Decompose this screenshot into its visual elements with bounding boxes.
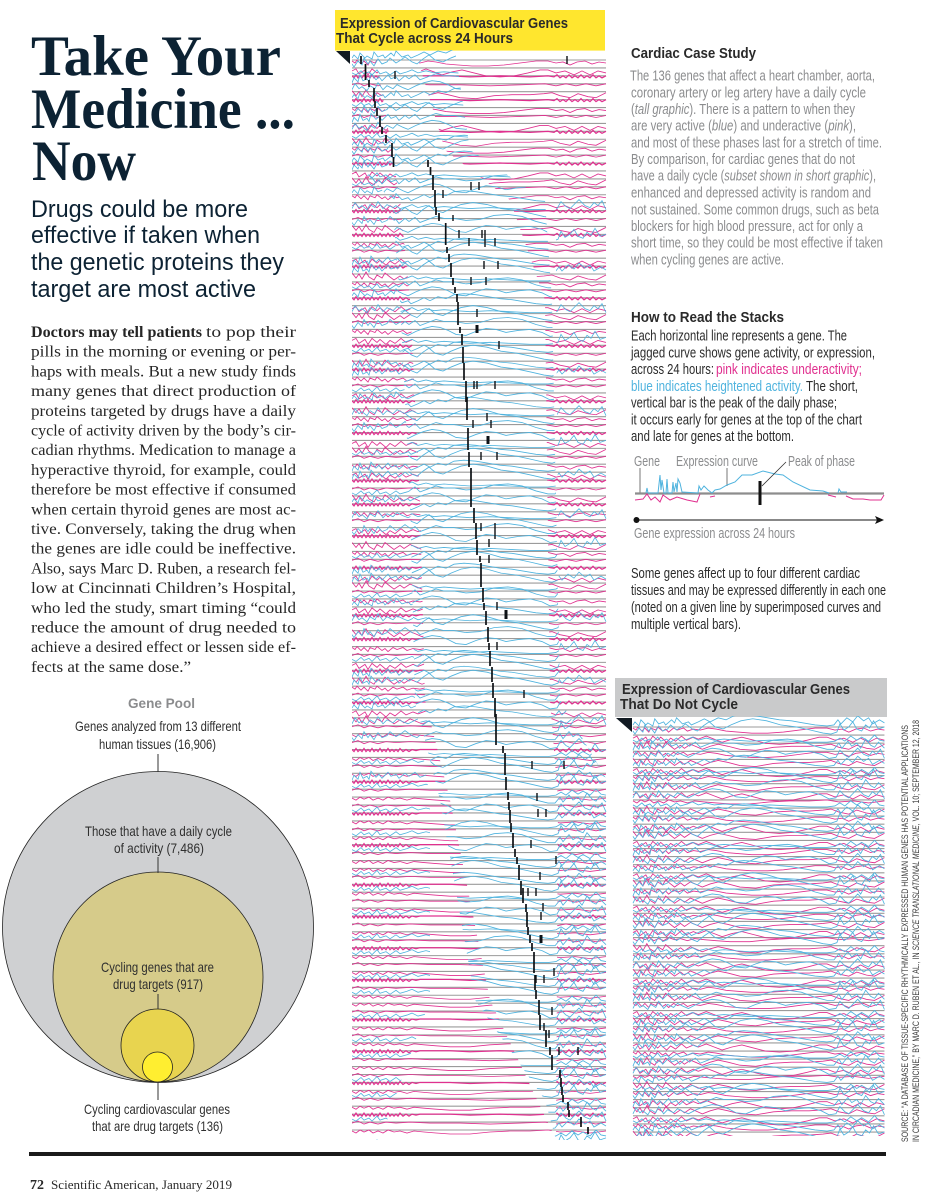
how to read paragraph: across 24 hours: [631, 362, 714, 378]
pink underactivity curves [352, 60, 606, 1134]
intro article text: Doctors may tell patients [31, 324, 202, 341]
circle: cycling cardiovascular drug targets [142, 1052, 172, 1082]
gray chart heading [615, 678, 887, 717]
blue active-phase curves [352, 48, 606, 1185]
intro article text: achieve a desired effect or lessen side ef- [31, 639, 296, 656]
intro article text: therefore be most effective if consumed [31, 482, 296, 499]
gray gene baselines [352, 60, 606, 1130]
gray chart heading: Expression of Cardiovascular Genes [622, 682, 850, 698]
case study paragraph: blockers for high blood pressure, act for only a [631, 219, 864, 235]
source note: IN CIRCADIAN MEDICINE,” BY MARC D. RUBEN ET AL., IN SCIENCE TRANSLATIONAL MEDICINE, VOL. 10; SEPTEMBER 12, 2018 [911, 720, 922, 1142]
peak-of-phase diagonal bars [361, 56, 588, 1134]
text block: multiple tissues note [631, 566, 886, 633]
footer folio: Scientific American, January 2019 [51, 1177, 232, 1192]
label: daily cycle [85, 823, 232, 856]
intro article text [31, 324, 297, 676]
label: cycling drug targets [101, 959, 214, 992]
title [31, 25, 295, 193]
yellow chart heading: Expression of Cardiovascular Genes [340, 16, 568, 32]
yellow chart heading [335, 10, 605, 51]
diagram peak leader [762, 462, 786, 486]
intro article text: cycle of activity driven by the body’s cir- [31, 422, 296, 440]
diagram baseline [635, 492, 884, 495]
title: Take Your [31, 25, 281, 88]
intro article text: hyperactive thyroid, for example, could [31, 462, 296, 479]
footer folio: 72 [30, 1178, 44, 1193]
subtitle: Drugs could be more [31, 196, 248, 223]
heading: cardiac case study: Cardiac Case Study [631, 46, 756, 62]
intro article text: when certain thyroid genes are most ac- [31, 501, 296, 518]
text block: multiple tissues note: multiple vertical bars). [631, 617, 741, 633]
how to read paragraph: blue indicates heightened activity. [631, 379, 803, 395]
secondary peak bars [395, 56, 578, 1055]
how to read paragraph: vertical bar is the peak of the daily phase; [631, 396, 837, 412]
how to read paragraph: and late for genes at the bottom. [631, 429, 794, 445]
source note [900, 720, 922, 1142]
label: genes analyzed: Genes analyzed from 13 different [75, 718, 241, 734]
how to read paragraph: Each horizontal line represents a gene. The [631, 329, 847, 345]
panel: gene pool nested circles [2, 695, 314, 1134]
intro article text: who led the study, smart timing “could [31, 600, 296, 617]
subtitle: target are most active [31, 276, 256, 303]
label: genes analyzed [75, 718, 241, 752]
how to read paragraph: The short, [806, 379, 858, 395]
how to read paragraph [630, 329, 875, 445]
intro article text: proteins targeted by drugs have a daily [31, 403, 296, 420]
title: Medicine ... [31, 78, 295, 141]
intro article text: tive. Conversely, taking the drug when [31, 521, 296, 538]
label: cycling drug targets: Cycling genes that are [101, 959, 214, 975]
intro article text: fects at the same dose.” [31, 659, 191, 676]
intro article text: the genes are idle could be ineffective. [31, 541, 296, 558]
diagram peak bar [758, 481, 762, 505]
thick overlapping peak bars [477, 325, 541, 943]
panel: cycling genes chart [335, 10, 606, 1185]
text block: cardiac case study [630, 46, 883, 268]
gene pool heading: Gene Pool [128, 695, 195, 711]
intro article text: Also, says Marc D. Ruben, a research fel- [31, 560, 296, 577]
panel: non-cycling genes chart [615, 678, 887, 1139]
case study paragraph [630, 69, 883, 268]
chart corner marker [336, 51, 350, 64]
subtitle: the genetic proteins they [31, 249, 284, 276]
heading: how to read the stacks: How to Read the Stacks [631, 310, 784, 326]
diagram blue curve [646, 471, 847, 493]
intro article text: many genes that direct production of [31, 383, 297, 400]
sparse blue spikes on the left [352, 160, 430, 1140]
diagram labels: Peak of phase [788, 454, 855, 470]
label: daily cycle: Those that have a daily cycle [85, 823, 232, 839]
time axis arrow [634, 516, 884, 524]
intro article text: low at Cincinnati Children’s Hospital, [31, 580, 296, 597]
label: cycling drug targets: drug targets (917) [113, 976, 203, 992]
subtitle [31, 196, 284, 303]
case study paragraph: coronary artery or leg artery have a daily cycle [631, 85, 866, 101]
how to read paragraph: it occurs early for genes at the top of the chart [631, 412, 862, 428]
case study paragraph: enhanced and depressed activity is random and [631, 185, 871, 201]
how to read paragraph: pink indicates underactivity; [716, 362, 862, 378]
label: cycling cardiovascular drug targets: that are drug targets (136) [92, 1118, 223, 1134]
subtitle: effective if taken when [31, 222, 260, 249]
yellow chart heading: That Cycle across 24 Hours [336, 31, 513, 47]
case study paragraph: are very active (blue) and underactive (pink), [631, 119, 856, 135]
circle: genes with daily cycle [53, 872, 263, 1082]
intro article text: haps with meals. But a new study finds [31, 363, 296, 380]
intro article text: cadian rhythms. Medication to manage a [31, 442, 296, 459]
label: genes analyzed: human tissues (16,906) [99, 736, 216, 752]
diagram labels [634, 454, 855, 470]
intro article text: pills in the morning or evening or per- [31, 344, 296, 361]
circle: all genes analyzed [2, 772, 314, 1082]
label: cycling cardiovascular drug targets [84, 1101, 230, 1134]
footer rule [29, 1152, 886, 1156]
case study paragraph: (tall graphic). There is a pattern to when they [631, 102, 856, 118]
circle: cycling drug targets [121, 1009, 194, 1082]
title: Now [32, 130, 136, 193]
label: cycling cardiovascular drug targets: Cycling cardiovascular genes [84, 1101, 230, 1117]
intro article text: to pop their [206, 324, 297, 341]
diagram labels: Gene [634, 454, 660, 470]
source note: SOURCE: “A DATABASE OF TISSUE-SPECIFIC RHYTHMICALLY EXPRESSED HUMAN GENES HAS POTENTIAL APPLICATIONS [900, 725, 911, 1142]
intro article text: reduce the amount of drug needed to [31, 620, 296, 636]
diagram pink curve [635, 494, 884, 502]
curves and baselines [633, 715, 884, 1139]
time axis label: Gene expression across 24 hours [634, 526, 795, 542]
how to read paragraph: jagged curve shows gene activity, or expression, [630, 345, 875, 361]
chart corner marker [616, 718, 632, 732]
text block: how to read the stacks [630, 310, 875, 445]
case study paragraph: By comparison, for cardiac genes that do not [631, 152, 855, 168]
diagram: how to read a gene line [634, 454, 884, 542]
diagram labels: Expression curve [676, 454, 758, 470]
text block: multiple tissues note: Some genes affect up to four different cardiac [631, 566, 860, 582]
diagram leader lines [640, 468, 727, 493]
case study paragraph: when cycling genes are active. [630, 252, 784, 268]
case study paragraph: have a daily cycle (subset shown in short graphic), [631, 169, 876, 185]
gray chart heading: That Do Not Cycle [620, 697, 738, 713]
leader lines [157, 754, 159, 1100]
sparse blue spikes on the right [556, 199, 606, 752]
label: daily cycle: of activity (7,486) [114, 840, 204, 856]
